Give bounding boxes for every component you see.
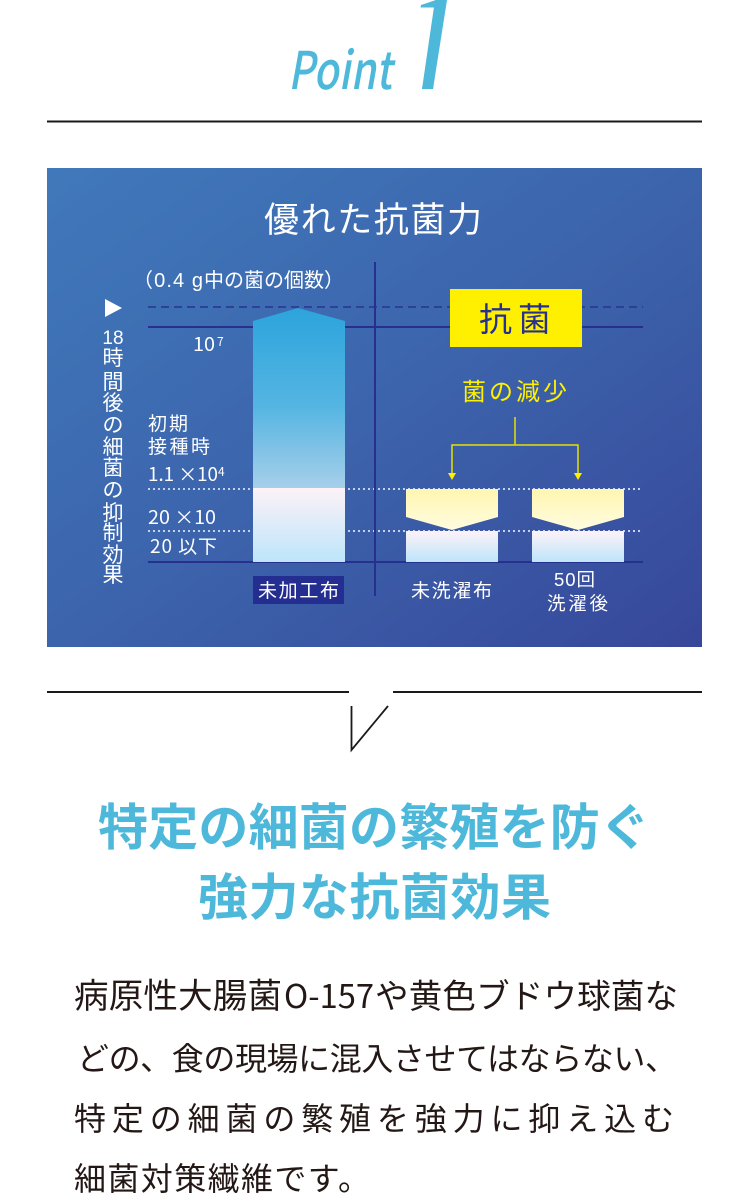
body text: 病原性大腸菌 xyxy=(74,978,282,1016)
y axis labels: 20 以下 xyxy=(150,532,217,559)
bar: after 50 washes xyxy=(532,489,624,562)
heading: 強力な抗菌効果 xyxy=(198,870,551,926)
label: untreated fabric xyxy=(253,576,344,604)
top rule xyxy=(47,120,702,122)
vertical axis title: の xyxy=(102,414,124,437)
vertical axis title: 制 xyxy=(102,522,124,545)
vertical axis title: 後 xyxy=(102,392,124,415)
bar: unwashed fabric xyxy=(406,489,498,562)
label: after 50 washes: 50回 xyxy=(554,569,595,590)
chart unit label xyxy=(133,269,344,292)
y axis labels: 初期 xyxy=(148,413,188,435)
chart unit label: （0.4 g xyxy=(133,269,203,292)
label: after 50 washes: 洗濯後 xyxy=(547,593,608,614)
label: bacteria reduction: 菌の減少 xyxy=(462,379,567,406)
vertical axis title: の xyxy=(102,479,124,502)
chart heading: 優れた抗菌力 xyxy=(264,201,482,240)
heading: 特定の細菌の繁殖を防ぐ xyxy=(98,800,650,856)
y axis labels xyxy=(148,330,225,559)
chart unit label: 中の菌の個数） xyxy=(204,269,344,292)
axis lines xyxy=(148,262,643,596)
y axis labels: 4 xyxy=(218,463,225,480)
label: untreated fabric: 未加工布 xyxy=(258,580,339,602)
title: Point 1 xyxy=(292,0,447,90)
body text: 特定の細菌の繁殖を強力に抑え込む xyxy=(74,1101,674,1137)
body text: どの、食の現場に混入させてはならない、 xyxy=(77,1041,677,1077)
vertical axis title: 時 xyxy=(102,347,124,370)
arrows: reduction bracket xyxy=(448,417,582,480)
bar: untreated fabric xyxy=(253,308,345,562)
body text: O-157 xyxy=(284,970,374,1018)
body text: や黄色ブドウ球菌な xyxy=(375,979,678,1016)
label: unwashed fabric: 未洗濯布 xyxy=(411,580,492,602)
vertical axis title: 抑 xyxy=(102,502,124,525)
yellow badge: antibacterial: 抗菌 xyxy=(479,301,551,338)
vertical axis title xyxy=(102,328,124,587)
y axis labels: 1.1 ×10 xyxy=(148,460,218,487)
divider with check notch xyxy=(47,691,702,750)
yellow badge: antibacterial xyxy=(450,289,582,347)
body text xyxy=(74,970,678,1197)
vertical axis title: 果 xyxy=(102,564,124,587)
body text: 細菌対策繊維です。 xyxy=(74,1161,370,1197)
y axis labels: 7 xyxy=(217,333,224,350)
y axis labels: 接種時 xyxy=(148,436,210,458)
y axis labels: 20 ×10 xyxy=(148,503,216,530)
vertical axis title: 菌 xyxy=(102,457,124,480)
label: after 50 washes xyxy=(547,569,608,614)
vertical axis title: 間 xyxy=(102,371,124,394)
y axis labels: 10 xyxy=(193,330,215,357)
vertical axis title: 18 xyxy=(102,328,124,349)
heading xyxy=(98,800,650,926)
vertical axis title: 細 xyxy=(102,436,124,459)
panel: antibacterial chart xyxy=(47,168,702,647)
vertical axis title: 効 xyxy=(102,544,124,567)
title: Point 1: Point xyxy=(285,29,402,105)
icon: axis triangle xyxy=(105,299,122,317)
